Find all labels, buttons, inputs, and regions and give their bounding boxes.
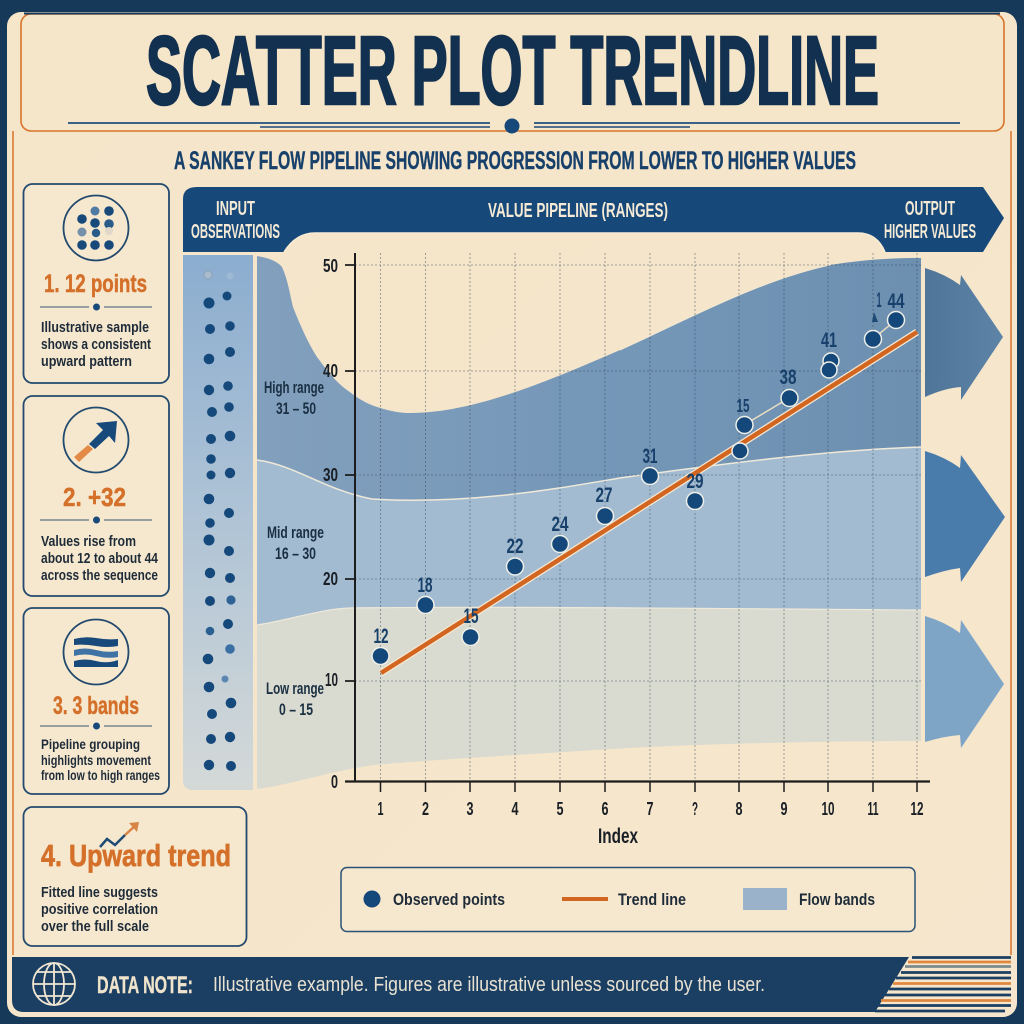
grid — [355, 253, 921, 781]
card 1 text: upward pattern — [41, 354, 132, 370]
card 3 divider — [40, 722, 152, 730]
x-axis labels: 11 — [868, 799, 878, 819]
card 3 text: Pipeline grouping — [41, 736, 140, 752]
point value labels: 1 — [876, 289, 882, 312]
y-axis labels: 30 — [323, 465, 338, 485]
axes — [345, 253, 930, 792]
y-axis labels: 20 — [323, 569, 338, 589]
card 1 text — [41, 320, 151, 370]
card 2 text: across the sequence — [41, 568, 158, 584]
icon: small trend arrow — [100, 822, 139, 847]
point value labels: 15 — [736, 396, 750, 416]
footer stripes — [875, 958, 1011, 1011]
card 1 text: shows a consistent — [41, 337, 151, 353]
legend: flow bands: Flow bands — [799, 890, 875, 909]
x-axis labels: 1 — [378, 799, 384, 819]
y-axis labels: 40 — [323, 361, 338, 381]
card 3 text: highlights movement — [41, 752, 151, 768]
card 2 text: Values rise from — [41, 534, 136, 550]
band: mid range — [257, 447, 921, 625]
band label: mid range — [267, 523, 324, 563]
legend: trend line: Trend line — [618, 890, 686, 909]
arrow: low output — [925, 616, 1004, 748]
card 1 divider — [40, 304, 152, 310]
band label: mid range: 16 – 30 — [275, 544, 316, 563]
output arrows — [925, 268, 1005, 748]
point value labels: 29 — [686, 470, 704, 493]
banner label: output: OUTPUT — [905, 198, 955, 220]
card 2: +32 — [24, 396, 169, 596]
card 1 text: Illustrative sample — [41, 320, 149, 336]
point value labels — [374, 289, 905, 648]
band label: high range: High range — [264, 378, 324, 397]
point value labels: 22 — [506, 535, 524, 558]
banner label: input: INPUT — [216, 198, 255, 220]
point value labels: 38 — [780, 366, 797, 389]
card 2 heading: 2. +32 — [63, 482, 126, 512]
icon: rising arrow — [64, 408, 128, 472]
y-axis labels: 0 — [331, 772, 338, 792]
band label: high range — [264, 378, 324, 418]
band: high range — [257, 256, 921, 500]
point value labels: 31 — [642, 445, 658, 468]
card 4 text: positive correlation — [41, 902, 158, 918]
y-axis labels: 10 — [325, 670, 338, 690]
legend — [341, 868, 915, 932]
x-axis labels: 10 — [822, 799, 834, 819]
icon: globe — [33, 963, 75, 1005]
card 3 text — [41, 736, 160, 783]
band label: low range: Low range — [266, 679, 324, 698]
card 4 text: Fitted line suggests — [41, 885, 158, 901]
x-axis labels: 4 — [512, 799, 518, 819]
card 2 text — [41, 534, 158, 584]
banner label: value pipeline: VALUE PIPELINE (RANGES) — [488, 200, 668, 222]
title divider — [68, 118, 960, 134]
pipeline header banner — [183, 187, 1004, 252]
arrow: high output — [925, 268, 1003, 400]
x-axis labels: 5 — [556, 799, 564, 819]
point value labels: 27 — [596, 484, 612, 507]
header panel — [21, 14, 1004, 131]
card 1: 12 points — [24, 184, 169, 383]
card 3 heading: 3. 3 bands — [53, 692, 139, 720]
banner label: observations: OBSERVATIONS — [191, 221, 280, 243]
flow bands — [257, 256, 921, 789]
card 3 text: from low to high ranges — [41, 767, 160, 783]
x-axis title: Index — [598, 825, 638, 848]
legend: trend line — [562, 890, 686, 909]
legend: flow bands — [743, 888, 875, 910]
observed points — [372, 312, 904, 664]
band label: low range — [266, 679, 324, 719]
legend: observed points — [364, 890, 505, 909]
x-axis labels: 7 — [646, 799, 654, 819]
footer label: DATA NOTE: — [97, 972, 193, 999]
trend line — [381, 332, 917, 673]
band label: low range: 0 – 15 — [279, 700, 313, 719]
card 3: 3 bands — [24, 608, 169, 794]
point value labels: 12 — [374, 625, 388, 648]
card 4: upward trend — [24, 807, 246, 946]
point value labels: 44 — [888, 290, 905, 313]
x-axis labels — [378, 799, 924, 819]
footer note text: Illustrative example. Figures are illustrative unless sourced by the user. — [213, 974, 765, 996]
x-axis labels: 2 — [422, 799, 429, 819]
input observations column — [183, 255, 253, 790]
x-axis labels: ? — [692, 799, 698, 819]
band label: high range: 31 – 50 — [276, 399, 316, 418]
x-axis labels: 3 — [466, 799, 474, 819]
card 4 text — [41, 885, 158, 935]
y-axis labels — [323, 256, 338, 792]
card 2 text: about 12 to about 44 — [41, 551, 158, 567]
arrow: mid output — [925, 451, 1005, 582]
icon: scatter dots — [64, 196, 128, 260]
card 4 text: over the full scale — [41, 919, 149, 935]
card 4 heading: 4. Upward trend — [41, 838, 231, 873]
point value labels: 41 — [821, 329, 837, 352]
x-axis labels: 6 — [602, 799, 608, 819]
x-axis labels: 8 — [736, 799, 742, 819]
band label: mid range: Mid range — [267, 523, 324, 542]
legend: observed points: Observed points — [393, 890, 505, 909]
scatter chart — [323, 253, 930, 848]
x-axis labels: 12 — [910, 799, 924, 819]
band: low range — [257, 607, 921, 789]
card 2 divider — [40, 516, 152, 524]
point value labels: 18 — [418, 574, 433, 597]
y-axis labels: 50 — [323, 256, 338, 276]
footer data note — [12, 957, 1011, 1012]
icon: wave bands — [64, 620, 128, 684]
point value labels: 24 — [552, 513, 569, 536]
card 1 heading: 1. 12 points — [44, 270, 147, 298]
x-axis labels: 9 — [780, 799, 788, 819]
point value labels: 15 — [464, 605, 479, 628]
